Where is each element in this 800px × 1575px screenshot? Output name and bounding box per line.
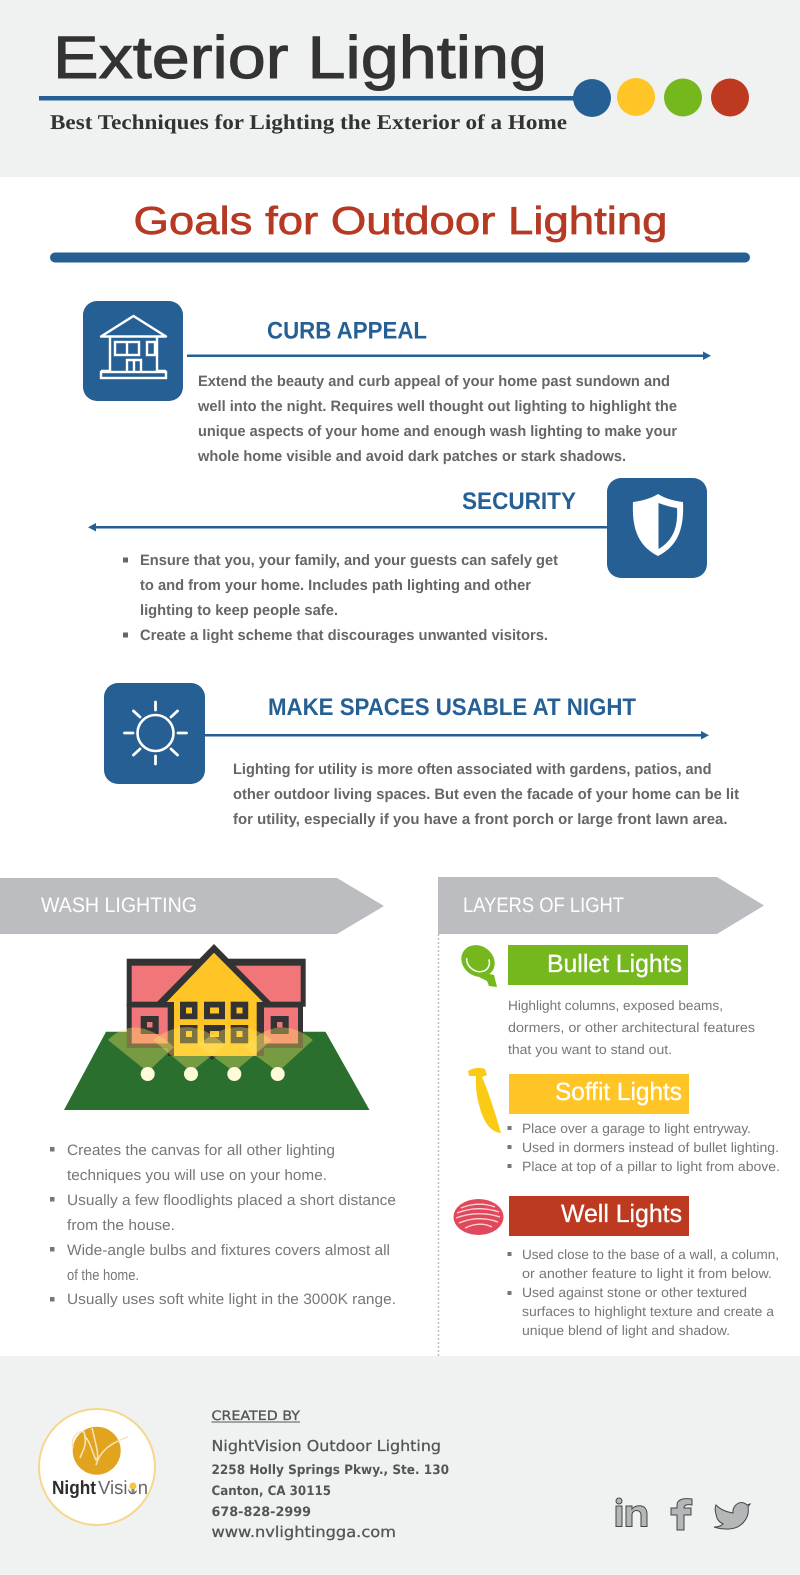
credits: www.nvlightingga.com bbox=[212, 1523, 396, 1541]
icon: well light bbox=[454, 1199, 504, 1235]
arrow bbox=[187, 352, 711, 360]
text block bbox=[123, 552, 558, 644]
bullet list: Place at top of a pillar to light from above. bbox=[522, 1159, 780, 1174]
arrow bbox=[88, 523, 607, 532]
icon: shield bbox=[607, 478, 707, 578]
text block: Ensure that you, your family, and your guests can safely get bbox=[140, 552, 558, 569]
logo bbox=[39, 1409, 155, 1525]
text block: Highlight columns, exposed beams, bbox=[508, 998, 723, 1013]
credits: Canton, CA 30115 bbox=[212, 1484, 331, 1499]
bullet list: Place over a garage to light entryway. bbox=[522, 1121, 751, 1136]
text block bbox=[197, 373, 677, 465]
header rule and colour dots bbox=[39, 78, 749, 117]
heading: CURB APPEAL bbox=[267, 318, 427, 344]
icon: house bbox=[83, 301, 183, 401]
text block bbox=[233, 761, 739, 828]
section heading bbox=[50, 200, 750, 262]
logo: Night bbox=[52, 1478, 97, 1499]
text block: Extend the beauty and curb appeal of your home past sundown and bbox=[198, 373, 670, 390]
text block: unique aspects of your home and enough wash lighting to make your bbox=[198, 423, 677, 440]
bullet list: Creates the canvas for all other lighting bbox=[67, 1142, 335, 1159]
icon: bullet light bbox=[455, 939, 501, 987]
title: Exterior Lighting bbox=[53, 24, 547, 91]
heading: SECURITY bbox=[462, 488, 576, 515]
icon: sun bbox=[104, 683, 205, 784]
panel: wash lighting bbox=[0, 878, 396, 1308]
heading: soffit lights bbox=[509, 1074, 689, 1114]
bullet list: or another feature to light it from below. bbox=[522, 1266, 772, 1281]
text block: well into the night. Requires well thought out lighting to highlight the bbox=[197, 398, 677, 415]
icon: twitter bbox=[714, 1503, 750, 1529]
bullet list: Usually a few floodlights placed a short distance bbox=[67, 1192, 396, 1209]
bullet list bbox=[50, 1142, 396, 1308]
section heading: Goals for Outdoor Lighting bbox=[134, 200, 668, 243]
heading: bullet lights bbox=[508, 945, 688, 985]
text block: Lighting for utility is more often associated with gardens, patios, and bbox=[233, 761, 712, 778]
banner: wash lighting bbox=[0, 878, 384, 934]
floodlights bbox=[141, 1067, 285, 1081]
text block: for utility, especially if you have a front porch or large front lawn area. bbox=[233, 811, 728, 828]
bullet list bbox=[508, 1247, 779, 1338]
icon: facebook bbox=[671, 1499, 692, 1530]
bullet list: Usually uses soft white light in the 3000K range. bbox=[67, 1291, 396, 1308]
bullet list: Used against stone or other textured bbox=[522, 1285, 747, 1300]
subtitle: Best Techniques for Lighting the Exterior of a Home bbox=[50, 110, 567, 134]
heading: well lights bbox=[509, 1196, 689, 1236]
bullet list: from the house. bbox=[67, 1217, 175, 1234]
panel: curb appeal bbox=[83, 301, 711, 465]
text block: that you want to stand out. bbox=[508, 1042, 672, 1057]
credits: NightVision Outdoor Lighting bbox=[212, 1437, 441, 1455]
bullet list: of the home. bbox=[67, 1267, 139, 1284]
credits: 2258 Holly Springs Pkwy., Ste. 130 bbox=[212, 1463, 449, 1478]
text block: to and from your home. Includes path lighting and other bbox=[140, 577, 531, 594]
panel: usable spaces bbox=[104, 683, 739, 828]
text block: whole home visible and avoid dark patches or stark shadows. bbox=[197, 448, 626, 465]
panel: security bbox=[88, 478, 707, 644]
social icons bbox=[616, 1498, 750, 1530]
text block bbox=[508, 998, 755, 1057]
bullet list bbox=[508, 1121, 780, 1174]
text block: dormers, or other architectural features bbox=[508, 1020, 755, 1035]
logo: Vision bbox=[98, 1478, 148, 1499]
banner: layers of light: LAYERS OF LIGHT bbox=[463, 894, 624, 917]
illustration: house with floodlights bbox=[64, 944, 370, 1110]
header band bbox=[0, 0, 800, 177]
credits: CREATED BY bbox=[212, 1409, 300, 1424]
bullet list: surfaces to highlight texture and create a bbox=[522, 1304, 774, 1319]
credits bbox=[212, 1409, 449, 1541]
windows bbox=[141, 1002, 289, 1043]
heading: soffit lights: Soffit Lights bbox=[555, 1078, 682, 1106]
bullet list: unique blend of light and shadow. bbox=[522, 1323, 730, 1338]
bullet list: Used close to the base of a wall, a column, bbox=[522, 1247, 779, 1262]
banner: layers of light bbox=[438, 877, 764, 934]
icon: linkedin bbox=[616, 1498, 647, 1526]
heading: well lights: Well Lights bbox=[561, 1200, 682, 1228]
heading: MAKE SPACES USABLE AT NIGHT bbox=[268, 694, 636, 721]
arrow bbox=[205, 731, 709, 740]
light cones bbox=[108, 1027, 313, 1072]
footer bbox=[0, 1356, 800, 1575]
text block: other outdoor living spaces. But even the facade of your home can be lit bbox=[233, 786, 739, 803]
bullet list: Wide-angle bulbs and fixtures covers almost all bbox=[67, 1242, 390, 1259]
heading: bullet lights: Bullet Lights bbox=[547, 950, 682, 978]
text block: lighting to keep people safe. bbox=[140, 602, 338, 619]
bullet list: techniques you will use on your home. bbox=[67, 1167, 327, 1184]
bullet list: Used in dormers instead of bullet lighting. bbox=[522, 1140, 779, 1155]
banner: wash lighting: WASH LIGHTING bbox=[41, 894, 197, 917]
credits: 678-828-2999 bbox=[212, 1505, 311, 1520]
panel: layers of light bbox=[438, 877, 780, 1338]
icon: soffit light bbox=[468, 1068, 501, 1133]
text block: Create a light scheme that discourages unwanted visitors. bbox=[140, 627, 548, 644]
